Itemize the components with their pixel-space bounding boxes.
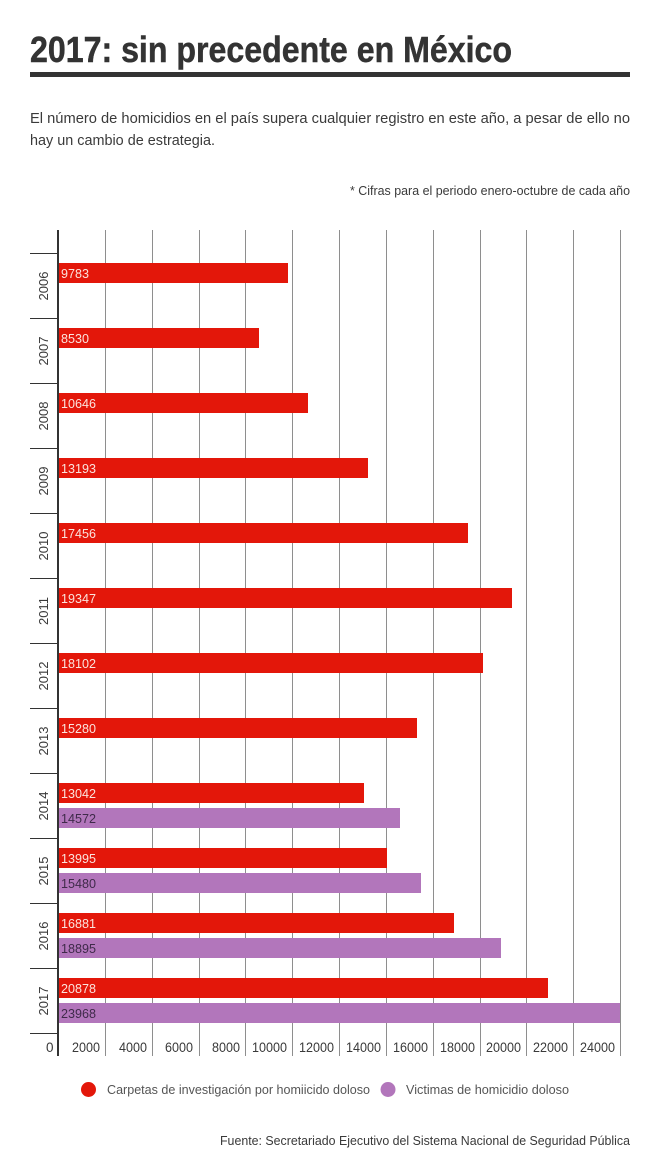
red bar values: 13193 xyxy=(61,461,96,476)
title: 2017: sin precedente en México xyxy=(30,29,512,70)
year labels: 2007 xyxy=(36,337,51,365)
intro text xyxy=(30,110,630,149)
year labels: 2014 xyxy=(36,792,51,820)
purple bar values: 15480 xyxy=(61,876,96,891)
purple bar values: 14572 xyxy=(61,811,96,826)
x axis labels xyxy=(46,1040,615,1055)
red bar values: 13995 xyxy=(61,851,96,866)
red bar values: 17456 xyxy=(61,526,96,541)
x axis labels: 10000 xyxy=(252,1040,287,1055)
x axis labels: 24000 xyxy=(580,1040,615,1055)
year labels: 2008 xyxy=(36,402,51,430)
year labels: 2011 xyxy=(36,597,51,625)
x axis labels: 14000 xyxy=(346,1040,381,1055)
x axis labels: 18000 xyxy=(440,1040,475,1055)
year labels: 2015 xyxy=(36,857,51,885)
red bars xyxy=(58,263,548,998)
purple bar values xyxy=(61,811,96,1021)
x axis labels: 22000 xyxy=(533,1040,568,1055)
red bar values xyxy=(61,266,96,996)
x axis labels: 6000 xyxy=(165,1040,193,1055)
red bar values: 18102 xyxy=(61,656,96,671)
red bar values: 19347 xyxy=(61,591,96,606)
bar chart xyxy=(30,230,620,1056)
year labels xyxy=(36,272,51,1015)
purple bars xyxy=(58,808,620,1023)
purple bar values: 18895 xyxy=(61,941,96,956)
legend label: carpetas: Carpetas de investigación por homiicido doloso xyxy=(107,1082,370,1097)
vertical axis xyxy=(57,230,59,1056)
footnote: * Cifras para el periodo enero-octubre de cada año xyxy=(350,183,630,198)
x axis labels: 4000 xyxy=(119,1040,147,1055)
red bar values: 10646 xyxy=(61,396,96,411)
legend label: victimas: Victimas de homicidio doloso xyxy=(406,1082,569,1097)
title rule xyxy=(30,72,630,77)
intro text: El número de homicidios en el país supera cualquier registro en este año, a pesar de ello no xyxy=(30,110,630,127)
x axis labels: 0 xyxy=(46,1040,54,1055)
year labels: 2006 xyxy=(36,272,51,300)
year labels: 2016 xyxy=(36,922,51,950)
x axis labels: 16000 xyxy=(393,1040,428,1055)
year labels: 2013 xyxy=(36,727,51,755)
red bar values: 13042 xyxy=(61,786,96,801)
x axis labels: 12000 xyxy=(299,1040,334,1055)
red bar values: 16881 xyxy=(61,916,96,931)
year labels: 2010 xyxy=(36,532,51,560)
legend marker: victimas xyxy=(380,1082,396,1097)
year labels: 2017 xyxy=(36,987,51,1015)
legend marker: carpetas xyxy=(81,1082,96,1097)
x axis labels: 8000 xyxy=(212,1040,240,1055)
purple bar values: 23968 xyxy=(61,1006,96,1021)
x axis labels: 20000 xyxy=(486,1040,521,1055)
intro text: hay un cambio de estrategia. xyxy=(30,132,215,149)
x axis labels: 2000 xyxy=(72,1040,100,1055)
year labels: 2009 xyxy=(36,467,51,495)
year labels: 2012 xyxy=(36,662,51,690)
legend xyxy=(81,1082,569,1097)
red bar values: 20878 xyxy=(61,981,96,996)
red bar values: 15280 xyxy=(61,721,96,736)
source: Fuente: Secretariado Ejecutivo del Sistema Nacional de Seguridad Pública xyxy=(220,1133,631,1148)
red bar values: 8530 xyxy=(61,331,89,346)
red bar values: 9783 xyxy=(61,266,89,281)
